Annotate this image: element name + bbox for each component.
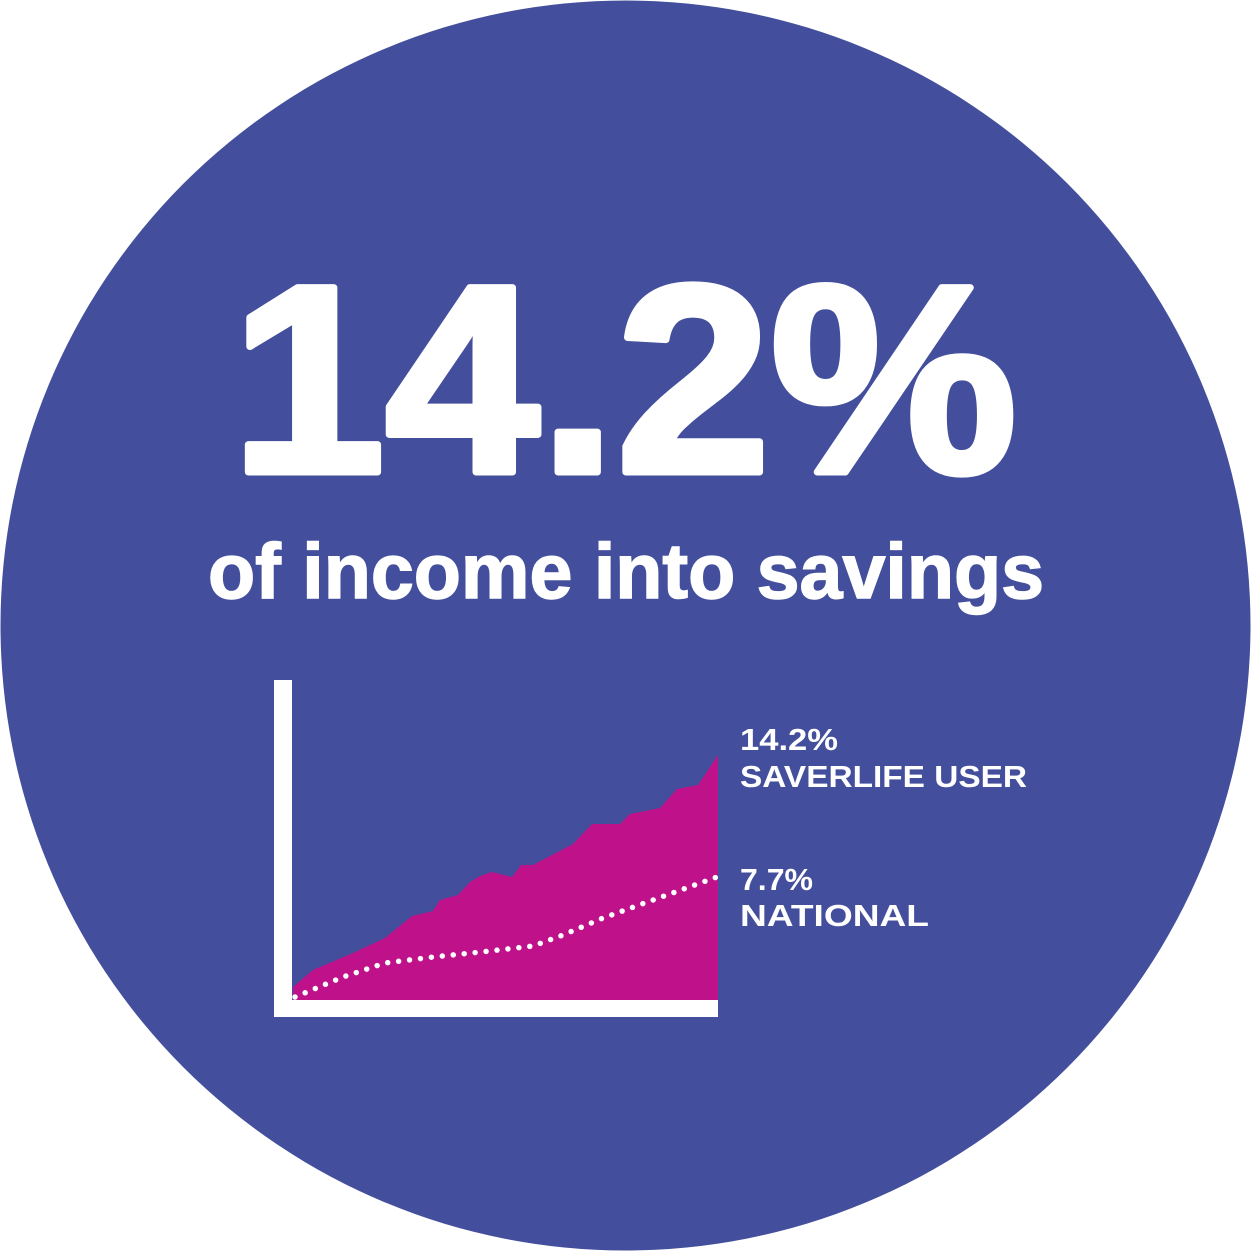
label: saverlife user: 14.2% (740, 722, 838, 757)
dotted line: national (295, 877, 717, 997)
label: national: NATIONAL (740, 898, 929, 933)
label: saverlife user (740, 722, 1027, 794)
label: national: 7.7% (740, 862, 813, 897)
area: saverlife user (293, 755, 718, 1000)
headline number: 14.2% (231, 229, 1017, 529)
axes (274, 680, 718, 1017)
chart: savings area chart (274, 680, 718, 1017)
label: saverlife user: SAVERLIFE USER (740, 759, 1027, 794)
label: national (740, 862, 929, 933)
subtitle: of income into savings (208, 527, 1044, 615)
